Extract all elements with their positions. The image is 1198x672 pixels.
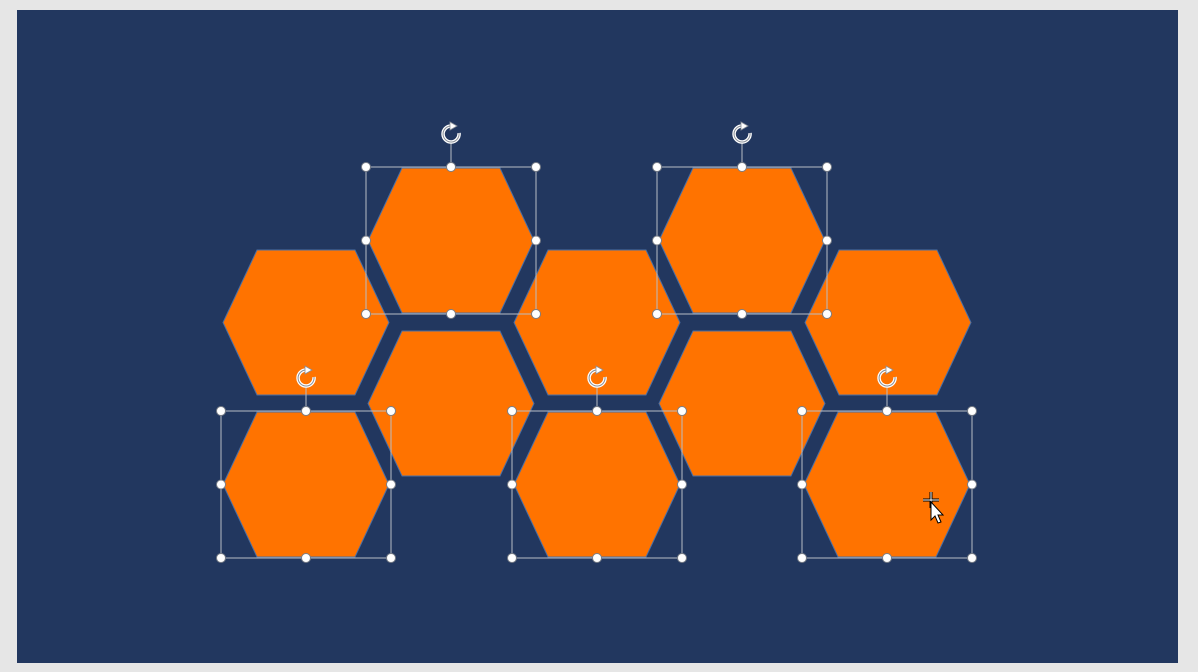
hexagon top 2	[659, 168, 825, 313]
hexagon middle 3	[805, 250, 971, 395]
hexagon bottom 1	[223, 412, 389, 557]
hexagon bottom 3	[804, 412, 970, 557]
hexagon grid	[223, 168, 971, 557]
hexagon lower 1	[368, 331, 534, 476]
hexagon lower 2	[659, 331, 825, 476]
hexagon top 1	[368, 168, 534, 313]
hexagon middle 1	[223, 250, 389, 395]
hexagon middle 2	[514, 250, 680, 395]
icon: move cursor	[923, 492, 943, 523]
selection handles	[216, 122, 976, 562]
hexagon bottom 2	[514, 412, 680, 557]
